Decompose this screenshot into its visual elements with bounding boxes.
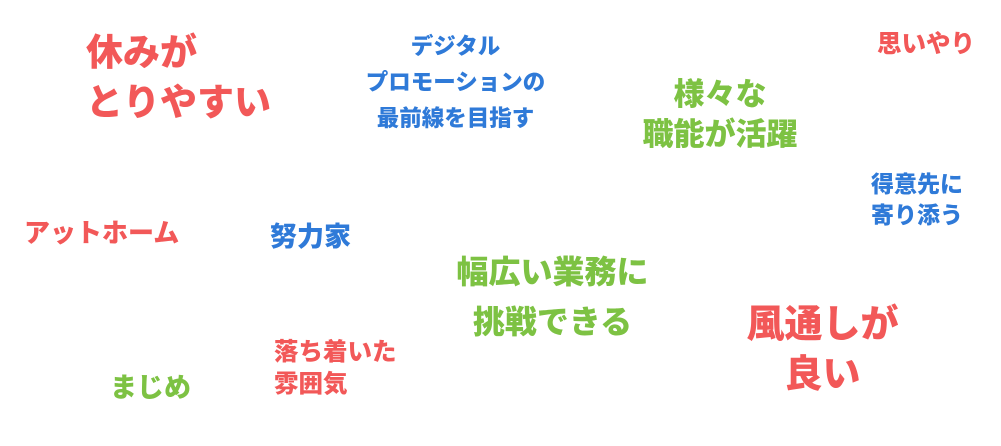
word: アットホーム: アットホーム <box>24 218 179 248</box>
word: 落ち着いた雰囲気: 落ち着いた <box>274 339 396 366</box>
word: 様々な職能が活躍: 職能が活躍 <box>642 117 798 152</box>
word: 休みがとりやすい: 休みが <box>86 32 197 73</box>
word: 得意先に寄り添う: 寄り添う <box>871 202 963 228</box>
word: 幅広い業務に挑戦できる <box>456 254 648 340</box>
word: 落ち着いた雰囲気 <box>274 338 396 398</box>
word: 様々な職能が活躍: 様々な <box>674 77 766 112</box>
word: 休みがとりやすい <box>86 32 271 123</box>
word: 得意先に寄り添う <box>871 171 963 228</box>
word: 風通しが良い: 良い <box>784 354 860 396</box>
word: 幅広い業務に挑戦できる: 幅広い業務に <box>456 254 648 290</box>
word: 思いやり: 思いやり <box>877 31 975 58</box>
word: デジタルプロモーションの最前線を目指す: プロモーションの <box>366 70 545 95</box>
word: デジタルプロモーションの最前線を目指す <box>366 34 545 131</box>
word: まじめ: まじめ <box>110 373 191 403</box>
word: 風通しが良い: 風通しが <box>746 304 898 346</box>
word: 休みがとりやすい: とりやすい <box>86 82 271 123</box>
word: 落ち着いた雰囲気: 雰囲気 <box>274 371 348 398</box>
word: 風通しが良い <box>746 303 898 396</box>
word: 努力家: 努力家 <box>270 222 351 252</box>
word: 幅広い業務に挑戦できる: 挑戦できる <box>473 304 632 340</box>
word: 様々な職能が活躍 <box>642 77 798 152</box>
word: デジタルプロモーションの最前線を目指す: デジタル <box>411 34 500 59</box>
word: 得意先に寄り添う: 得意先に <box>871 171 963 197</box>
word: デジタルプロモーションの最前線を目指す: 最前線を目指す <box>377 106 534 131</box>
